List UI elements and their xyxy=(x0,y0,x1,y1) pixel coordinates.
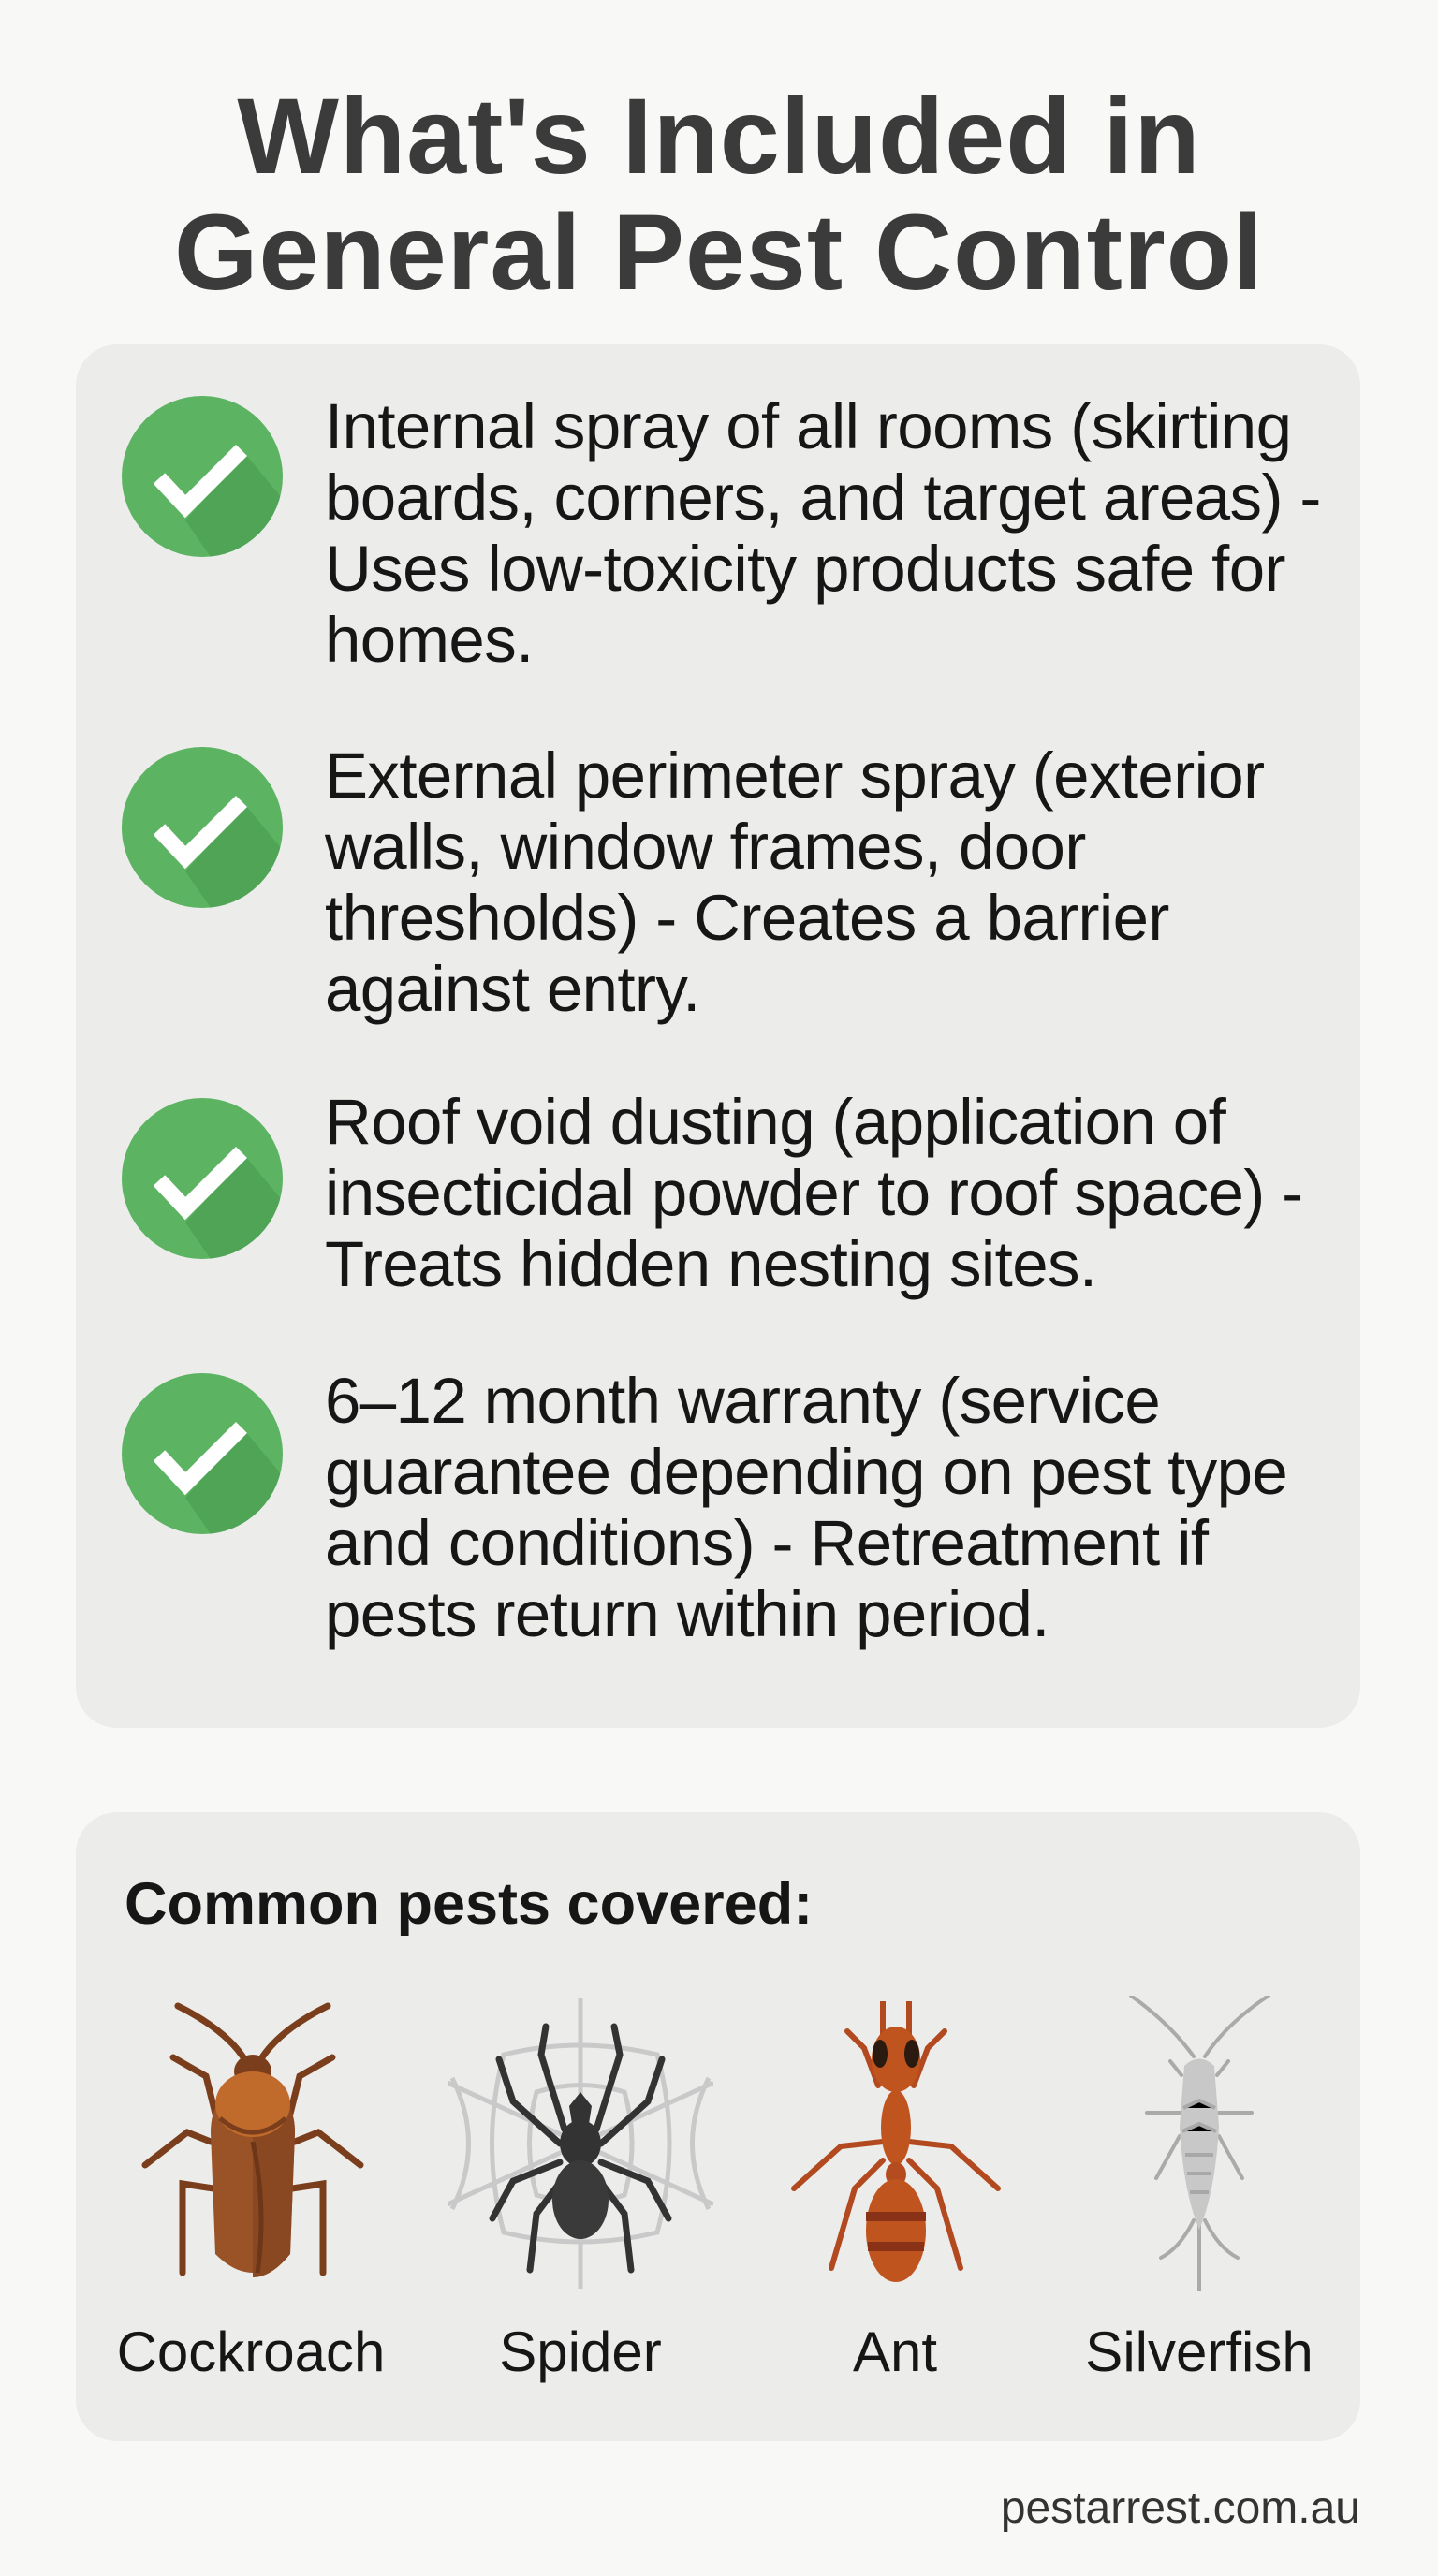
text: against entry. xyxy=(325,953,700,1025)
icon: check xyxy=(122,1098,283,1259)
heading: common pests: Common pests covered: xyxy=(125,1871,813,1937)
label: spider: Spider xyxy=(499,2320,662,2383)
panel: common pests xyxy=(76,1812,1360,2441)
text: Roof void dusting (application of xyxy=(325,1086,1225,1158)
title: General Pest Control xyxy=(174,193,1264,313)
title xyxy=(174,77,1264,313)
text: External perimeter spray (exterior xyxy=(325,739,1264,812)
icon: cockroach xyxy=(142,2003,363,2277)
text: thresholds) - Creates a barrier xyxy=(325,882,1169,954)
label: silverfish: Silverfish xyxy=(1085,2320,1313,2383)
icon: check xyxy=(122,396,283,557)
text: boards, corners, and target areas) - xyxy=(325,461,1321,534)
text xyxy=(325,1086,1303,1300)
text: guarantee depending on pest type xyxy=(325,1436,1287,1508)
text xyxy=(324,739,1264,1025)
text: Uses low-toxicity products safe for xyxy=(325,533,1285,605)
text: homes. xyxy=(325,604,534,676)
text: and conditions) - Retreatment if xyxy=(325,1507,1208,1579)
text xyxy=(325,390,1321,676)
text: Internal spray of all rooms (skirting xyxy=(325,390,1291,462)
item: external spray xyxy=(122,739,1264,1025)
label: cockroach: Cockroach xyxy=(117,2320,385,2383)
footer url: pestarrest.com.au xyxy=(1001,2483,1360,2533)
title: What's Included in xyxy=(237,77,1201,197)
panel: included services xyxy=(76,344,1360,1728)
text: 6–12 month warranty (service xyxy=(325,1365,1160,1437)
item: warranty xyxy=(122,1365,1287,1650)
label: ant: Ant xyxy=(853,2320,937,2383)
text xyxy=(325,1365,1287,1650)
icon: check xyxy=(122,1373,283,1534)
text: pests return within period. xyxy=(325,1578,1049,1650)
icon: check xyxy=(122,747,283,908)
icon: spider xyxy=(448,1998,713,2289)
text: Treats hidden nesting sites. xyxy=(325,1228,1096,1300)
text: insecticidal powder to roof space) - xyxy=(325,1157,1303,1229)
icon: ant xyxy=(791,2001,1001,2282)
text: walls, window frames, door xyxy=(325,811,1086,883)
icon: silverfish xyxy=(1129,1996,1271,2291)
item: roof void xyxy=(122,1086,1303,1300)
item: internal spray xyxy=(122,390,1321,676)
